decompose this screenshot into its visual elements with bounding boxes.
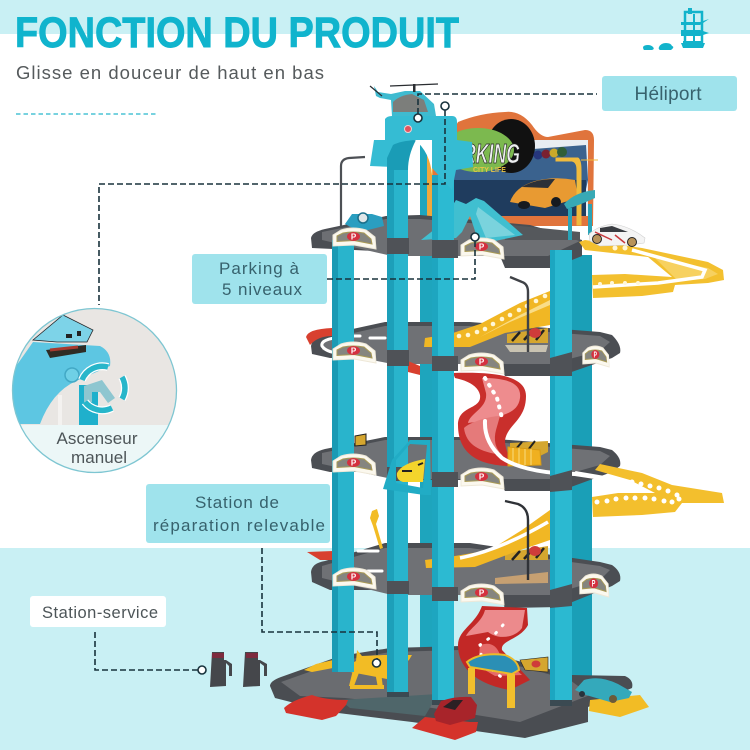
lamp post: floor 4	[505, 501, 528, 580]
callout: Parking à 5 niveaux: 5 niveaux	[222, 280, 302, 299]
lamp post: top floor	[341, 157, 365, 226]
callout: Station de réparation relevable: Station de	[195, 493, 279, 512]
top background band	[0, 0, 750, 34]
barrier, base	[520, 657, 548, 672]
yellow upper spiral ramp	[579, 240, 724, 298]
callout: Héliport	[602, 76, 737, 111]
white car	[589, 224, 645, 246]
lamp post: floor 2	[510, 277, 528, 352]
arch and helipad top	[370, 116, 473, 190]
P sign floor 3 left	[333, 454, 376, 475]
callout: Parking à 5 niveaux	[192, 254, 327, 304]
P sign floor 4 left: P	[351, 572, 357, 582]
P sign floor 2 centre: P	[479, 358, 485, 366]
P sign floor 2 right: P	[594, 351, 597, 360]
leader line: Héliport	[414, 94, 597, 122]
P sign floor 4 centre: P	[479, 588, 485, 598]
P sign floor 2 left	[333, 342, 376, 363]
white track floor 3	[485, 421, 628, 482]
callout: Héliport: Héliport	[634, 84, 702, 105]
billboard base stripes	[500, 224, 580, 240]
elevator with yellow car	[383, 440, 431, 495]
red back slide, floor 2	[306, 328, 420, 375]
finish gate	[467, 654, 519, 708]
red launch ramp left	[284, 695, 348, 720]
parking signs	[333, 228, 609, 605]
yellow upper diagonal ramp	[424, 291, 550, 347]
P sign floor 2 left: P	[351, 346, 357, 356]
inset circle: manual lift	[10, 305, 180, 475]
inset circle: manual lift: Ascenseur	[56, 429, 138, 448]
back pillars	[420, 140, 592, 680]
yellow lower diagonal ramp	[425, 510, 550, 568]
barrier: floor 2	[507, 328, 548, 343]
leader line: Station-service	[95, 632, 206, 674]
floor 2	[311, 322, 620, 376]
callout: Station de réparation relevable	[146, 484, 330, 543]
title: FONCTION DU PRODUIT	[15, 9, 459, 57]
P sign floor 2 centre	[461, 353, 504, 374]
toy car on top floor	[345, 213, 384, 232]
yellow ramp and teal car	[575, 678, 649, 717]
callout: Station-service	[30, 596, 166, 627]
icon: rotation arrows	[82, 366, 125, 410]
barrier back, floor 3	[355, 434, 548, 456]
barrier, floor 4	[505, 546, 548, 560]
leader line: Station de réparation	[262, 548, 380, 667]
P sign floor 2 right	[583, 346, 609, 367]
P sign floor 4 right	[580, 574, 609, 597]
callout: Parking à 5 niveaux: Parking à	[219, 259, 300, 278]
P sign floor 3 centre	[461, 468, 504, 489]
floor 4	[311, 543, 620, 608]
leader line: Ascenseur manuel	[99, 102, 449, 305]
teal slide	[421, 198, 523, 241]
subtitle: Glisse en douceur de haut en bas	[16, 62, 324, 83]
red spiral lower	[458, 606, 530, 690]
base plate	[270, 646, 632, 738]
P sign floor 3 left: P	[351, 458, 357, 468]
P sign floor 1 centre: P	[479, 242, 485, 252]
icon: parking tower and cars	[643, 8, 709, 50]
P sign floor 1 left	[333, 228, 376, 249]
helicopter	[370, 84, 438, 116]
toy parking tower	[270, 84, 724, 740]
P sign floor 4 centre	[461, 584, 504, 605]
pillar collars	[387, 238, 572, 608]
P sign floor 3 centre: P	[479, 472, 485, 482]
yellow service station	[304, 509, 412, 689]
P sign floor 4 left	[333, 568, 376, 589]
white path and dots on floor 2	[322, 336, 385, 353]
dark shadow at pillar bases	[387, 692, 572, 706]
icon: fuel pumps	[210, 652, 267, 687]
P sign floor 4 right: P	[592, 578, 596, 589]
leader line: Parking	[327, 233, 479, 279]
callout: Station de réparation relevable: réparation relevable	[153, 516, 325, 535]
white path, floor 4	[340, 551, 382, 571]
P sign floor 1 centre	[461, 238, 504, 259]
front pillars	[332, 165, 572, 703]
barrier front, floor 3	[508, 447, 541, 466]
P sign floor 1 left: P	[351, 232, 357, 242]
small billboard	[564, 190, 595, 240]
bottom background band	[0, 548, 750, 750]
callout: Station-service: Station-service	[42, 604, 158, 622]
subtitle dashed rule	[16, 113, 157, 115]
billboard	[427, 112, 598, 226]
red back slide, floor 4	[307, 551, 333, 560]
red spiral upper	[453, 373, 526, 466]
inset circle: manual lift: manuel	[71, 448, 127, 467]
yellow lower spiral ramp	[575, 464, 724, 517]
floor 3	[311, 437, 620, 491]
red launch ramp with red car	[412, 697, 478, 740]
traffic lights	[534, 147, 567, 160]
logo text: RKING	[463, 138, 520, 169]
floor 1	[311, 215, 582, 268]
logo tagline: CITY LIFE	[473, 167, 506, 174]
